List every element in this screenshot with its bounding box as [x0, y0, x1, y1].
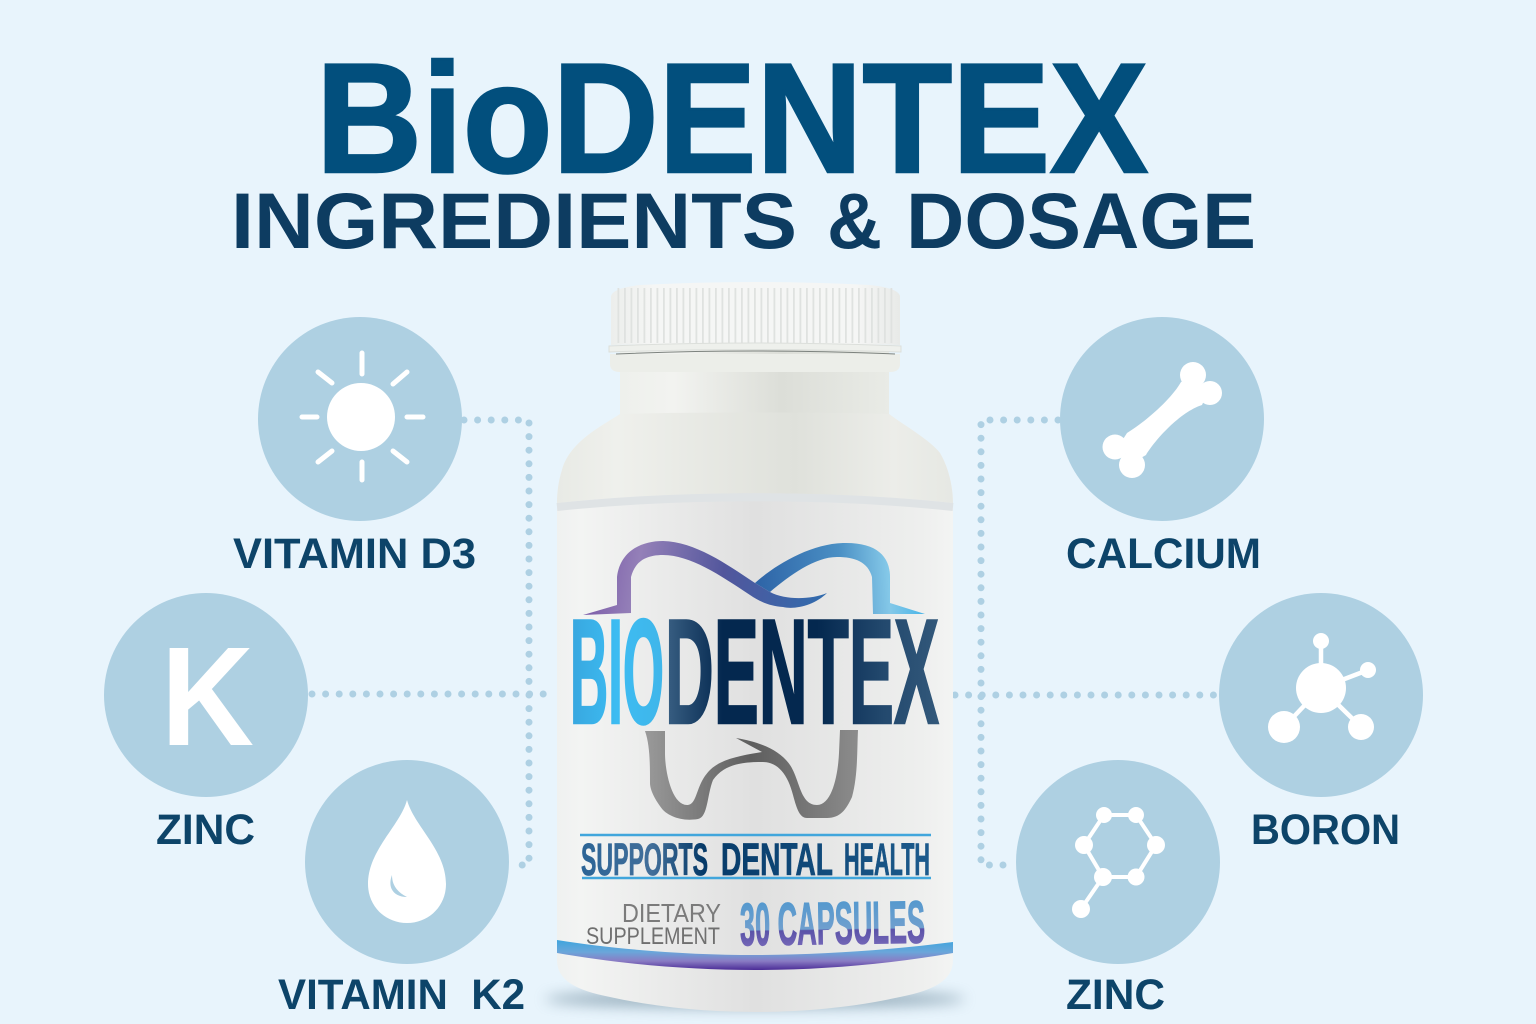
neck	[620, 350, 889, 416]
dietary supplement text	[586, 898, 721, 950]
neck ring	[610, 354, 900, 372]
supplement bottle	[545, 282, 965, 1012]
label: zinc right: ZINC	[1066, 971, 1165, 1019]
tagline rules	[580, 835, 931, 878]
label: boron: BORON	[1251, 806, 1400, 854]
icon: hexagon molecule	[1016, 760, 1220, 964]
title: BioDENTEX	[316, 32, 1148, 206]
icon: water drop	[305, 760, 509, 964]
dietary supplement text: SUPPLEMENT	[586, 923, 720, 950]
icon: molecule	[1219, 593, 1423, 797]
base colour band	[557, 940, 953, 970]
shoulder shading	[557, 412, 953, 503]
tagline: SUPPORTS	[581, 834, 708, 885]
bottle shadow	[545, 990, 965, 1008]
panel: boron	[1219, 593, 1423, 854]
label: vitamin K2: VITAMIN K2	[278, 971, 525, 1019]
subtitle	[231, 176, 1256, 265]
infographic canvas: DENTEX	[665, 588, 939, 755]
label seam	[557, 497, 953, 507]
logo: BIODENTEX wordmark: BIO	[570, 588, 664, 755]
label: zinc left: ZINC	[156, 806, 255, 854]
dotted connectors	[312, 420, 1218, 865]
panel: vitamin K2	[278, 760, 525, 1019]
panel: calcium	[1060, 317, 1264, 578]
dietary supplement text: DIETARY	[622, 898, 721, 928]
supplement bottle: 30 CAPSULES	[740, 889, 925, 958]
subtitle: INGREDIENTS	[231, 176, 797, 265]
panel: vitamin D3	[233, 317, 476, 578]
label: vitamin D3: VITAMIN D3	[233, 530, 476, 578]
logo: tooth outline bottom	[645, 730, 858, 820]
logo: tooth outline top	[583, 541, 925, 615]
tagline: DENTAL	[721, 834, 833, 885]
icon: letter K: K	[161, 617, 254, 775]
label: calcium: CALCIUM	[1066, 530, 1261, 578]
cap	[609, 282, 901, 354]
panel: zinc (K)	[104, 593, 308, 854]
panel: zinc (hexagon)	[1016, 760, 1220, 1019]
icon: sun	[258, 317, 462, 521]
icon: letter K	[104, 593, 308, 797]
supplement bottle: HEALTH	[844, 834, 930, 885]
subtitle: &	[827, 176, 882, 265]
subtitle: DOSAGE	[906, 176, 1256, 265]
bottle body	[557, 414, 953, 1012]
icon: bone	[1060, 317, 1264, 521]
